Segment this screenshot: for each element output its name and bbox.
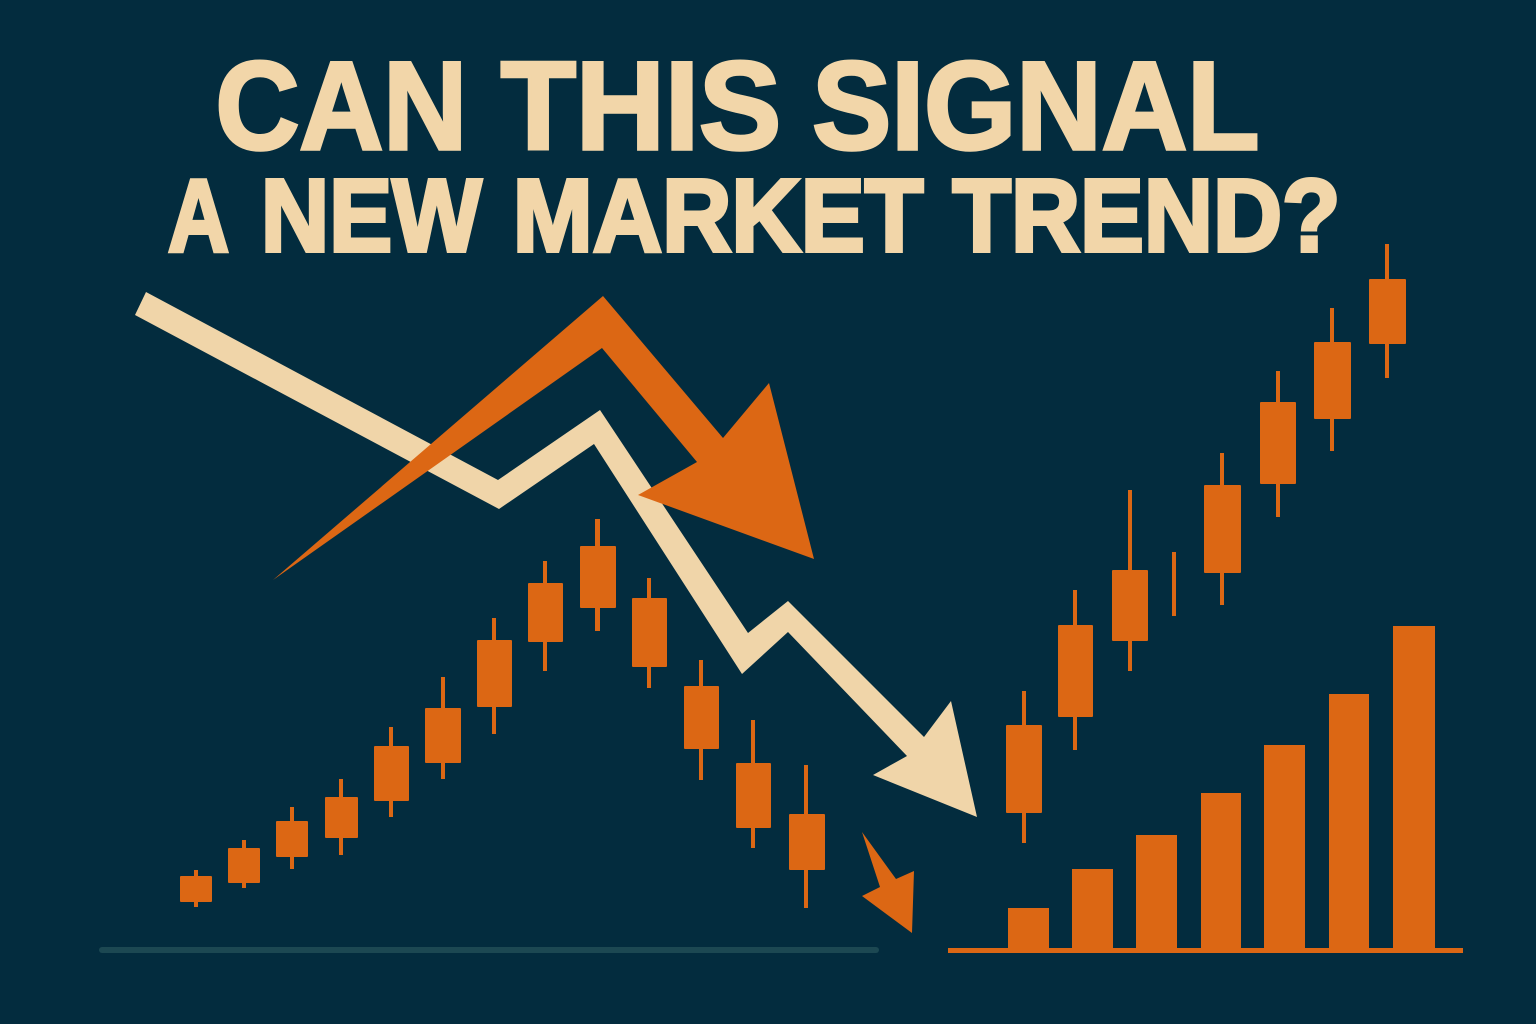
title: CAN bbox=[216, 37, 467, 176]
cream zigzag arrow bbox=[135, 292, 977, 817]
title: MARKET bbox=[513, 158, 923, 273]
title: SIGNAL bbox=[812, 37, 1260, 176]
title: A bbox=[168, 158, 229, 273]
candlesticks: rising and falling bbox=[180, 519, 825, 908]
title bbox=[168, 37, 1340, 273]
left baseline bbox=[99, 947, 879, 953]
volume bar chart bbox=[948, 626, 1463, 953]
small orange arrow bbox=[862, 832, 914, 933]
title: NEW bbox=[261, 158, 482, 273]
candlesticks: right uptrend bbox=[1006, 244, 1406, 843]
title: TREND? bbox=[952, 158, 1340, 273]
title: THIS bbox=[501, 37, 781, 176]
orange zigzag arrow bbox=[273, 296, 814, 580]
